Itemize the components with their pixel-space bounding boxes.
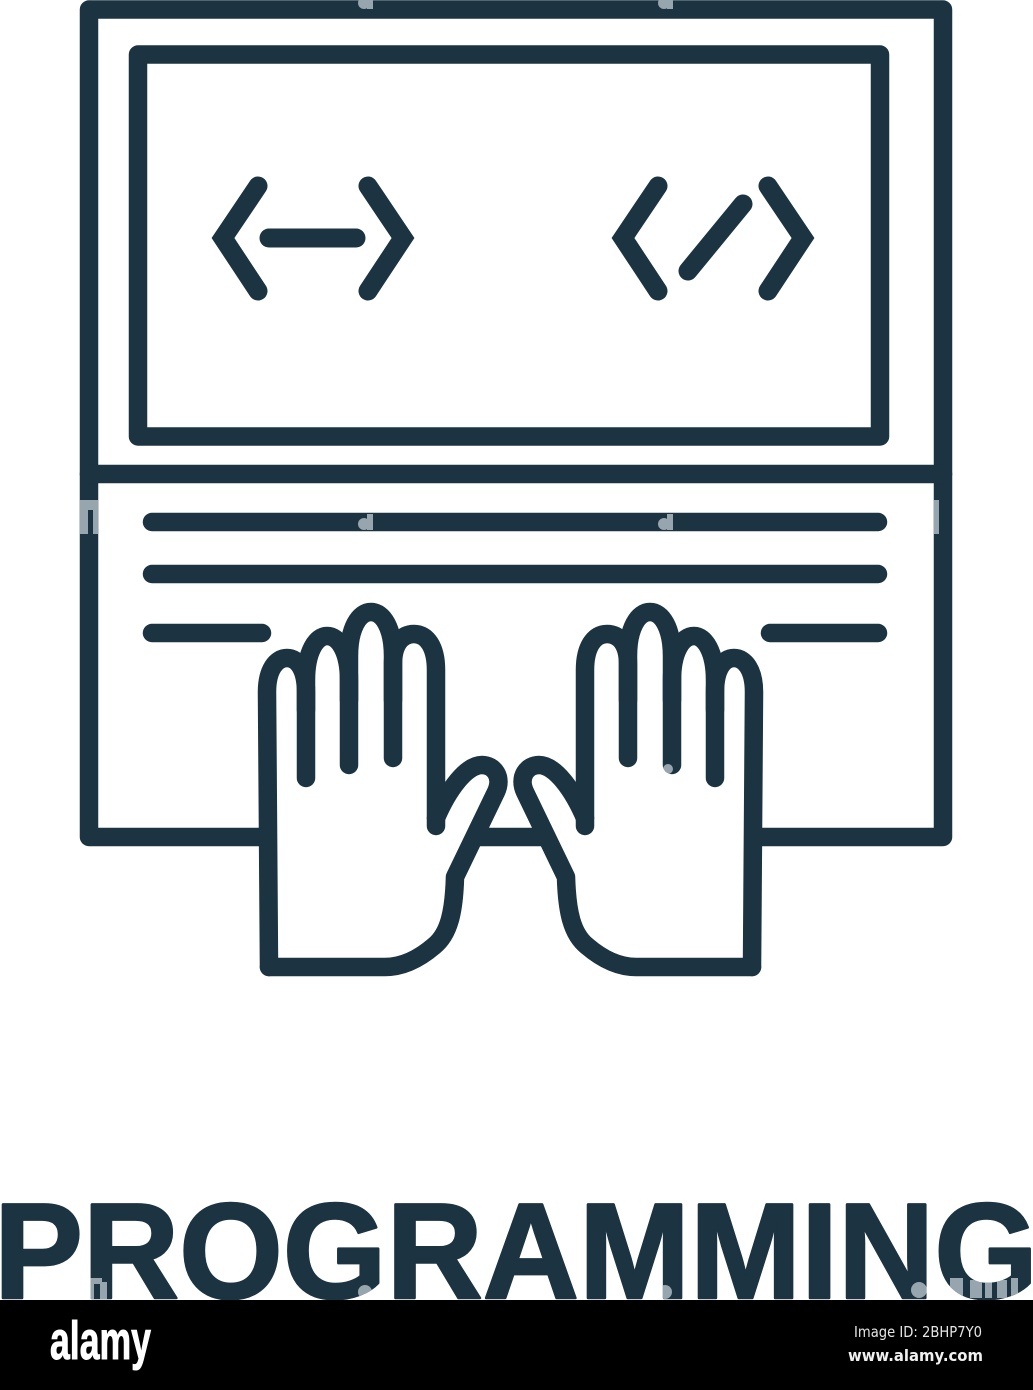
website url: www.alamy.com (848, 1346, 983, 1365)
icon: double arrow code symbol (223, 186, 403, 291)
footer band (0, 1300, 1033, 1390)
image id: Image ID: 2BHP7Y0 (854, 1323, 982, 1341)
panel: laptop screen (138, 54, 880, 436)
icon: left hand (267, 612, 498, 967)
keyboard lines (152, 522, 878, 633)
icon: closing tag code symbol (623, 186, 803, 291)
footer logo: alamy (50, 1311, 151, 1371)
icon: right hand (523, 612, 754, 967)
icon: laptop body (89, 10, 943, 837)
